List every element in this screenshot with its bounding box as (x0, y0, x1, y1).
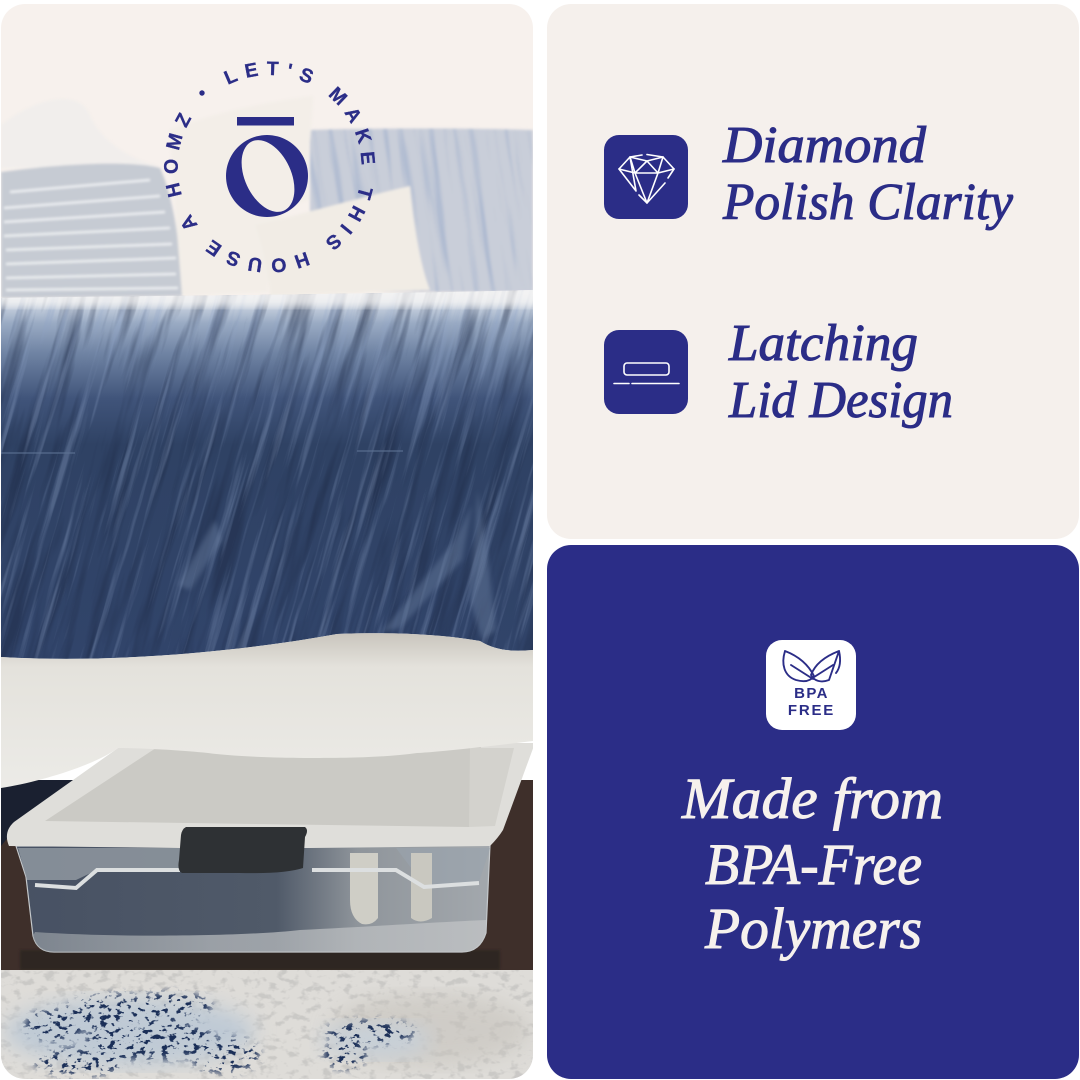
latch (178, 827, 307, 873)
heading: diamond polish clarity: Polish Clarity (722, 174, 1014, 231)
heading: latching lid design (728, 315, 953, 429)
heading: made from BPA-free polymers: Polymers (704, 896, 922, 961)
heading: made from BPA-free polymers: BPA-Free (705, 832, 922, 897)
heading: made from BPA-free polymers: Made from (681, 766, 943, 831)
heading: latching lid design: Lid Design (728, 372, 953, 429)
icon: diamond (604, 135, 688, 219)
white bed base (1, 633, 533, 788)
icon: BPA free: BPA (794, 685, 829, 702)
dark shadow under bed (1, 780, 73, 846)
panel: features (547, 4, 1079, 539)
lid (7, 743, 535, 848)
heading: diamond polish clarity (722, 117, 1014, 231)
wood floor (0, 780, 540, 975)
panel: BPA free (547, 545, 1079, 1079)
striped pillow (0, 160, 190, 300)
storage box (7, 743, 535, 952)
logo mark (226, 117, 308, 217)
box body (16, 845, 490, 952)
far left faint blanket (1, 99, 160, 168)
heading: made from BPA-free polymers (681, 766, 943, 961)
heading: diamond polish clarity: Diamond (722, 117, 927, 174)
fabric highlights (178, 490, 496, 640)
box rim line (35, 870, 479, 888)
upper bed scene (1, 127, 533, 298)
dot (199, 90, 205, 96)
rug (0, 970, 540, 1080)
heading: latching lid design: Latching (728, 315, 918, 372)
wall background (1, 4, 533, 304)
logo badge: LET'S MAKE THIS HOUSE A HOMZ (164, 61, 376, 272)
comforter (1, 290, 533, 659)
stacked plates (350, 853, 378, 924)
icon: BPA free: FREE (788, 702, 835, 719)
icon: latching lid (604, 330, 688, 414)
icon: BPA free (766, 640, 856, 730)
circular slogan (178, 75, 362, 259)
panel: product photo (0, 4, 725, 1080)
blanket behind pillows (308, 127, 533, 292)
cream pillows (178, 131, 312, 284)
